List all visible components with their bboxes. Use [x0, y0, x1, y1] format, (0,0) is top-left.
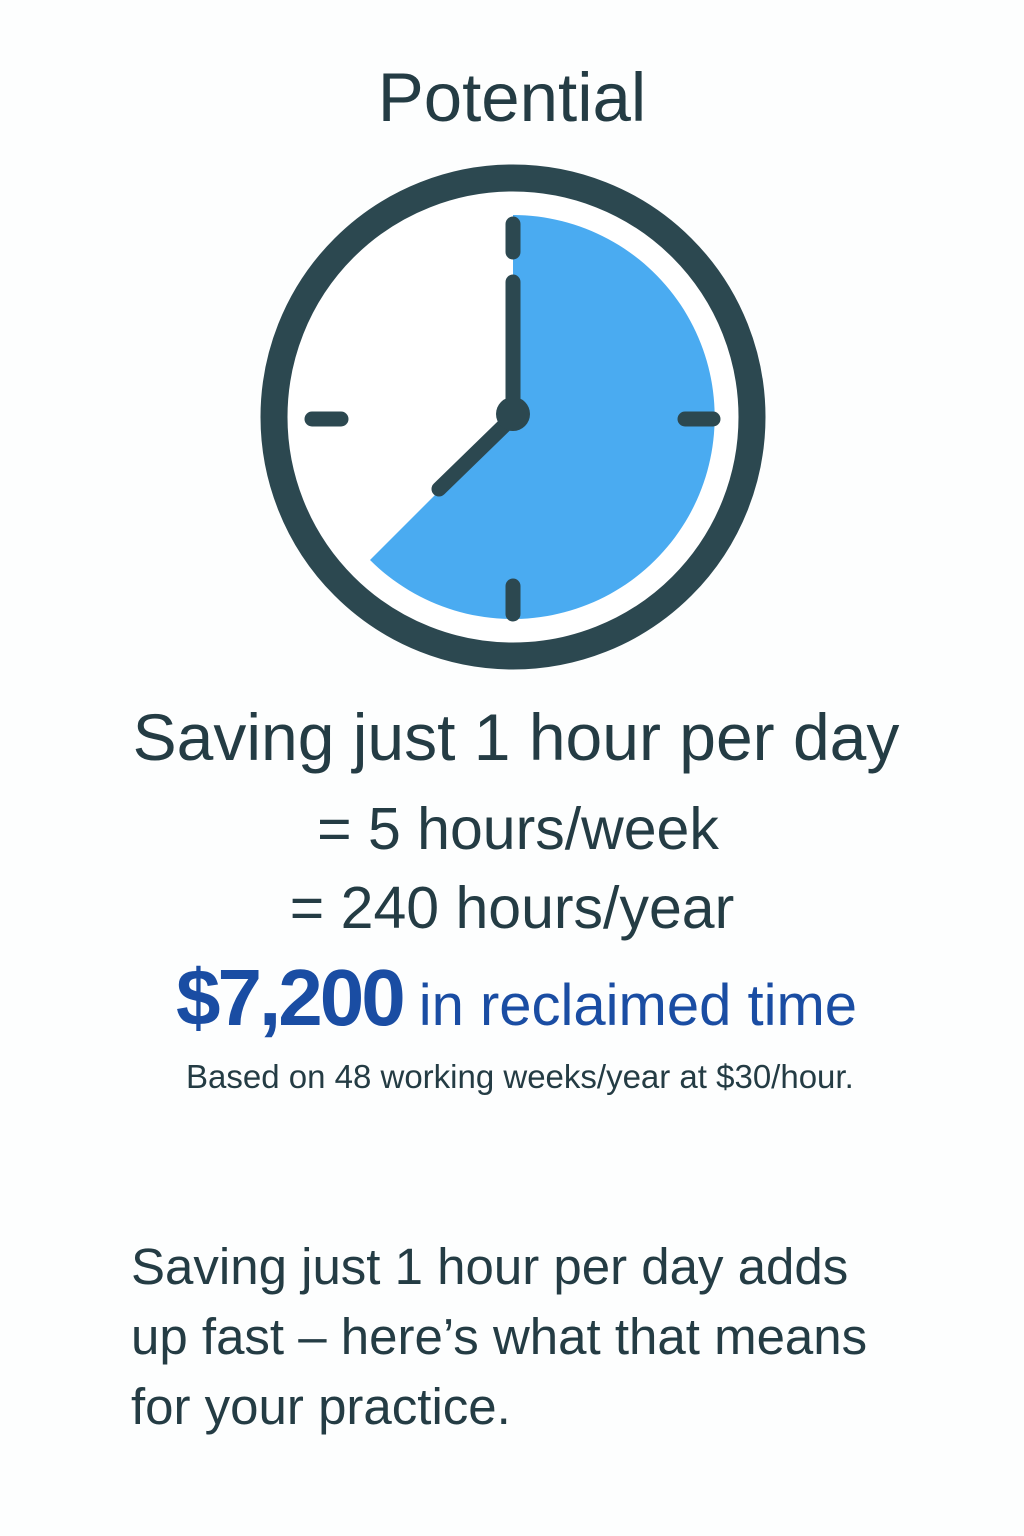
icon: clock: [260, 164, 766, 670]
headline: Saving just 1 hour per day: [133, 700, 899, 774]
yearly stat: = 240 hours/year: [290, 875, 734, 941]
title: Potential: [378, 59, 646, 136]
paragraph: up fast – here’s what that means: [131, 1308, 867, 1365]
blue wedge: [370, 215, 715, 619]
paragraph: for your practice.: [131, 1378, 511, 1435]
money stat: $7,200 in reclaimed time: [176, 953, 857, 1042]
footnote: Based on 48 working weeks/year at $30/hour.: [186, 1058, 854, 1095]
weekly stat: = 5 hours/week: [317, 796, 719, 862]
paragraph: [131, 1238, 867, 1435]
paragraph: Saving just 1 hour per day adds: [131, 1238, 848, 1295]
